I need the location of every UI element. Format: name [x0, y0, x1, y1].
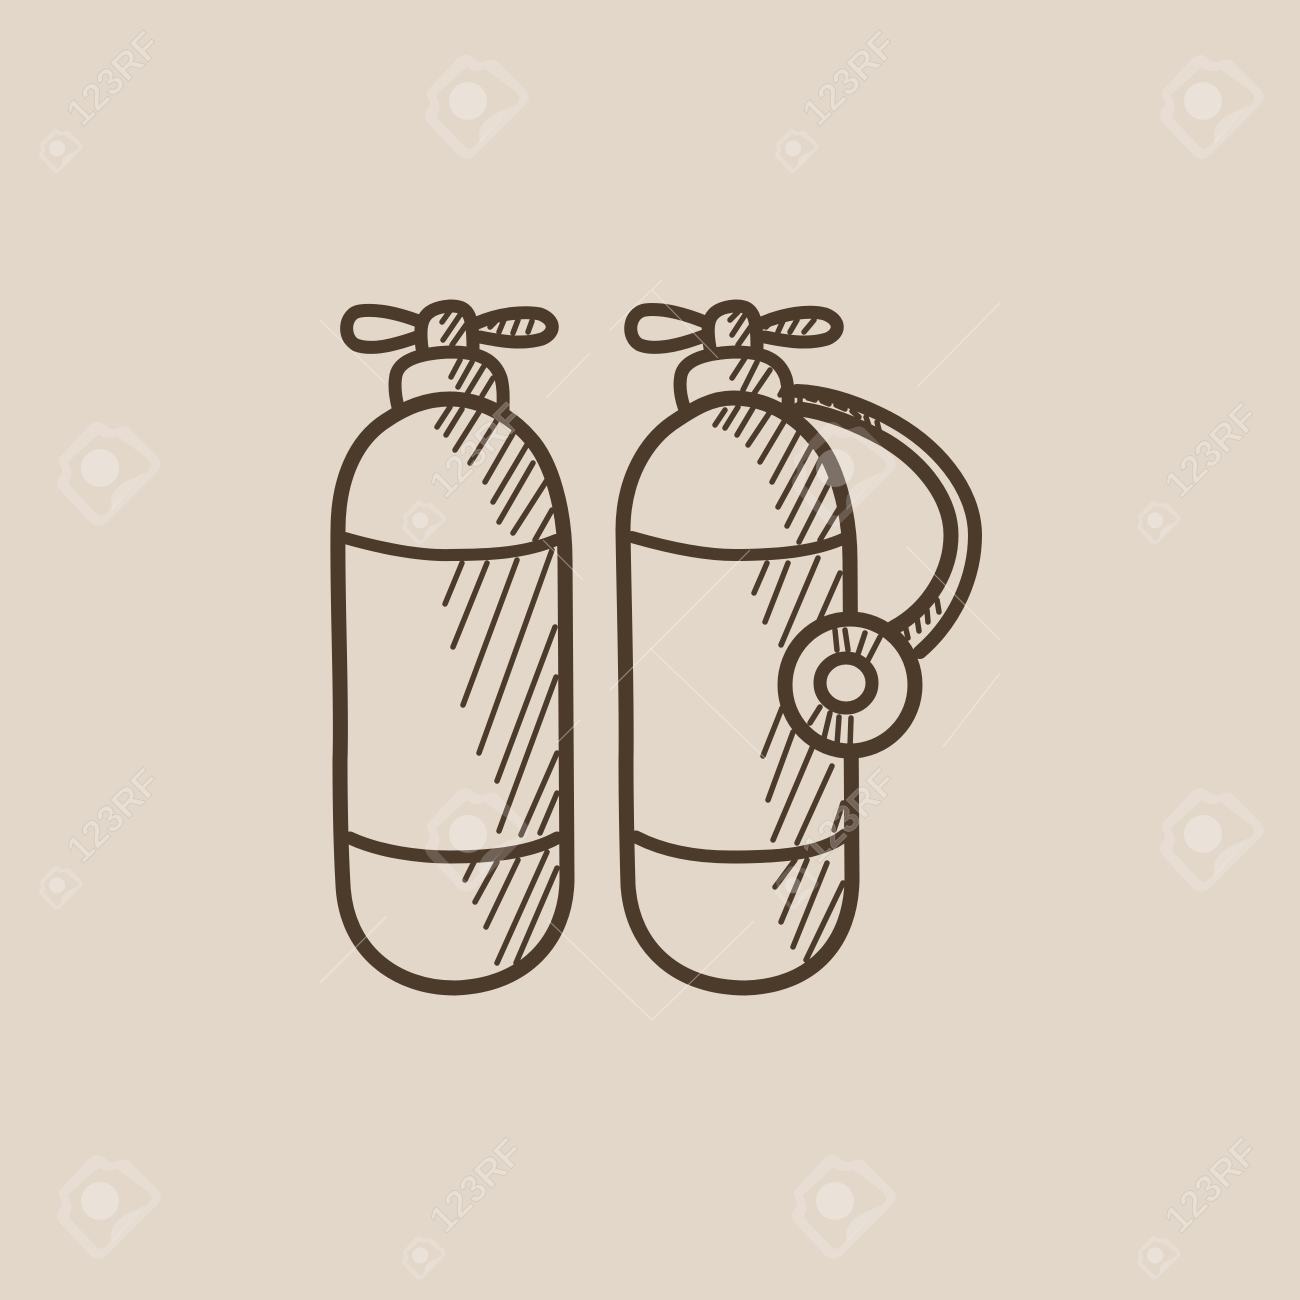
watermark: row 1 [39, 24, 1264, 173]
left tank lower band [350, 838, 557, 857]
watermark: row 3 [39, 761, 1264, 910]
left tank body [338, 399, 567, 988]
watermark: row 4 [57, 1131, 1267, 1280]
watermark: row 2 [57, 396, 1267, 545]
right tank body [623, 398, 852, 988]
left tank neck [395, 352, 503, 410]
left tank hatching [437, 308, 557, 963]
watermark: row 1: 123RF [59, 24, 169, 134]
watermark: row 3: 123RF [795, 761, 905, 871]
left tank upper band [345, 538, 556, 555]
watermark: row 2: 123RF [1157, 396, 1267, 506]
left tank valve knob [421, 306, 473, 348]
pressure gauge [785, 619, 915, 751]
watermark: row 2: 123RF [422, 396, 532, 506]
right tank valve knob [708, 306, 757, 348]
right tank hatching [715, 312, 843, 960]
icon: right oxygen tank with gauge [623, 306, 975, 988]
right tank neck [680, 352, 788, 410]
icon: left oxygen tank [338, 306, 567, 988]
pressure hose [797, 391, 975, 652]
watermark: row 1: 123RF [795, 24, 905, 134]
watermark: row 3: 123RF [59, 761, 169, 871]
watermark: row 4: 123RF [422, 1131, 532, 1241]
faint diagonal guide lines [320, 280, 1000, 1020]
watermark: row 4: 123RF [1157, 1131, 1267, 1241]
right tank lower band [636, 835, 845, 857]
right tank upper band [632, 537, 845, 555]
